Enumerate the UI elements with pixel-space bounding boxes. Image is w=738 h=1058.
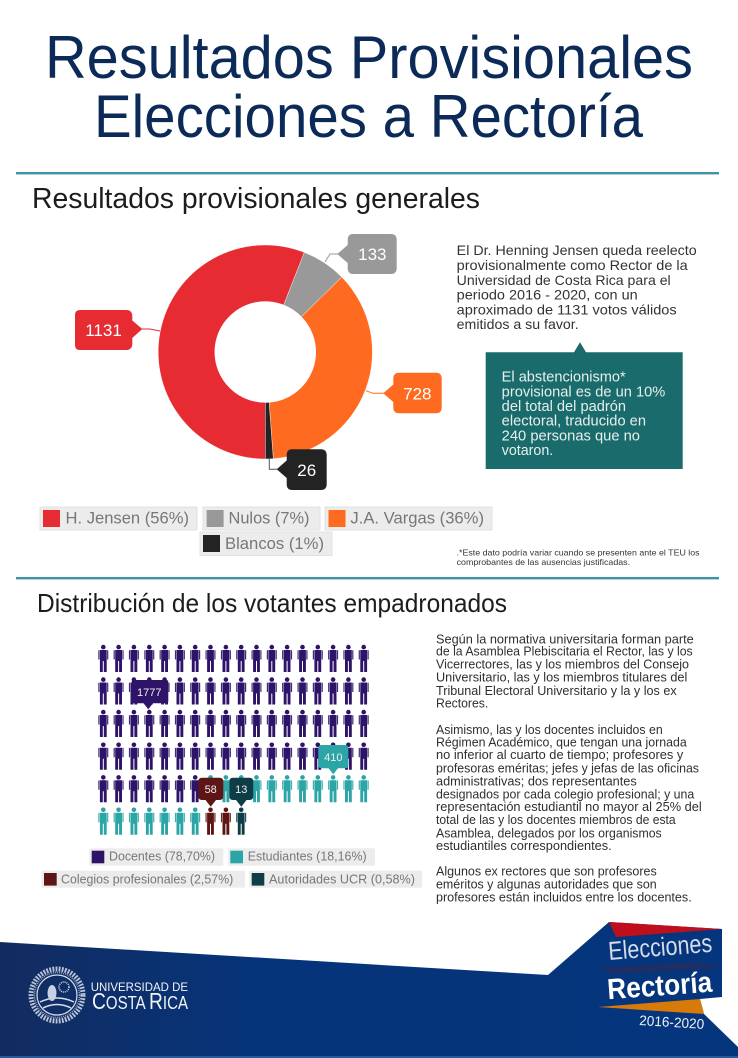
text: normativa universitaria: no inferior al cuarto de tiempo; profesores y (436, 747, 684, 762)
callout: abstencionismo: del total del padrón (502, 399, 626, 415)
callout: abstencionismo: electoral, traducido en (502, 414, 646, 430)
text: Henning Jensen paragraph: provisionalmente como Rector de la (457, 257, 688, 273)
legend item: J.A. Vargas: J.A. Vargas (36%) (350, 510, 484, 528)
callout: abstencionismo: provisional es de un 10% (502, 384, 665, 400)
tooltip: 410 (318, 745, 348, 774)
callout: 728: 728 (403, 384, 431, 404)
text: normativa universitaria: designados por cada colegio profesional; y una (436, 786, 695, 801)
heading: distribucion: Distribución de los votantes empadronados (37, 588, 507, 618)
badge text: years: 2016-2020 (639, 1012, 705, 1032)
legend item: Estudiantes: Estudiantes (18,16%) (248, 849, 367, 864)
text: Henning Jensen paragraph: Universidad de Costa Rica para el (457, 272, 671, 288)
row 1 (98, 645, 369, 672)
legend item: H. Jensen: H. Jensen (56%) (66, 510, 189, 528)
title (45, 24, 693, 150)
row 6 (98, 808, 246, 835)
footnote (457, 548, 700, 567)
segment: Nulos (284, 252, 342, 317)
legend item: J.A. Vargas (325, 507, 492, 530)
text: normativa universitaria: Tribunal Electoral Universitario y la y los ex (436, 683, 677, 698)
callout: abstencionismo: El abstencionismo* (502, 370, 626, 386)
logo: university name: COSTA RICA (92, 988, 188, 1014)
ribbon: dark fold (600, 962, 722, 974)
callout: 728 (366, 373, 442, 413)
text: normativa universitaria: representación estudiantil no mayor al 25% del (436, 799, 702, 814)
legend item: H. Jensen (40, 507, 197, 530)
logo: university name: UNIVERSIDAD DE (91, 980, 188, 994)
legend item: Colegios profesionales: Colegios profesionales (2,57%) (61, 871, 233, 886)
legend item: Blancos: Blancos (1%) (225, 535, 324, 553)
row 4 (98, 742, 369, 770)
callout: 1131: 1131 (85, 321, 122, 340)
text: normativa universitaria: Asimismo, las y los docentes incluidos en (436, 722, 663, 737)
tooltip: 1777 (132, 680, 168, 709)
badge: Elecciones Rectoría 2016-2020 (598, 922, 722, 1032)
ribbon: red (609, 922, 722, 937)
text: Henning Jensen paragraph: periodo 2016 - 2020, con un (457, 286, 638, 302)
callout: abstencionismo: 240 personas que no (502, 428, 640, 444)
callout: abstencionismo: votaron. (502, 443, 553, 459)
tooltip: 410: 410 (324, 752, 342, 764)
text: Henning Jensen paragraph (457, 242, 697, 332)
legend item: Nulos: Nulos (7%) (228, 510, 310, 528)
text: normativa universitaria: profesoras eméritas; jefes y jefas de las oficinas (436, 760, 699, 775)
text: normativa universitaria: estudiantiles correspondientes. (436, 838, 612, 853)
legend item: Nulos (203, 507, 320, 530)
text: normativa universitaria: total de las y los docentes miembros de esta (436, 812, 676, 827)
title: Resultados Provisionales (45, 24, 693, 91)
text: normativa universitaria: administrativas; dos representantes (436, 774, 637, 789)
tooltip: 1777: 1777 (137, 687, 162, 699)
segment: H. Jensen (158, 245, 304, 459)
title: Elecciones a Rectoría (94, 83, 644, 150)
text: normativa universitaria: Algunos ex rectores que son profesores (436, 864, 657, 879)
logo: university crest (31, 969, 83, 1021)
callout: 26: 26 (297, 461, 316, 480)
text: Henning Jensen paragraph: emitidos a su favor. (457, 316, 579, 332)
text: normativa universitaria: Régimen Académico, que tengan una jornada (436, 735, 687, 750)
callout: abstencionismo (486, 342, 683, 469)
row 2 (98, 677, 369, 704)
text: Henning Jensen paragraph: El Dr. Henning Jensen queda reelecto (457, 242, 697, 258)
legend item: Docentes: Docentes (78,70%) (109, 849, 215, 864)
callout: 26 (269, 449, 327, 490)
tooltip: 13: 13 (235, 784, 247, 796)
segment: Blancos (265, 402, 273, 459)
text: normativa universitaria: Rectores. (436, 696, 488, 711)
pictogram chart (98, 645, 369, 835)
text: normativa universitaria: Según la normativa universitaria forman parte (436, 631, 694, 646)
callout: 133: 133 (358, 245, 386, 264)
legend: donut (40, 507, 492, 556)
text: normativa universitaria: Universitario, las y los miembros titulares del (436, 670, 687, 685)
badge text: Elecciones: Elecciones (607, 928, 713, 966)
heading: resultados generales: Resultados provisionales generales (32, 183, 480, 215)
text: normativa universitaria: Asamblea, delegados por los organismos (436, 825, 662, 840)
callout: 1131 (75, 310, 160, 350)
tooltip: 13 (229, 778, 253, 807)
footer band (0, 922, 738, 1058)
row 5 (98, 775, 369, 802)
text: normativa universitaria: eméritos y algunas autoridades que son (436, 876, 657, 891)
legend item: Blancos (200, 532, 332, 556)
text: normativa universitaria (436, 631, 702, 905)
badge text: Rectoría: Rectoría (606, 967, 714, 1006)
tooltip: 58: 58 (205, 784, 217, 796)
legend: pictogram (42, 848, 422, 888)
ribbon: orange (598, 999, 704, 1014)
tooltip: 58 (198, 778, 223, 807)
footnote: comprobantes de las ausencias justificadas. (457, 557, 630, 567)
text: Henning Jensen paragraph: aproximado de 1131 votos válidos (457, 301, 677, 317)
row 3 (98, 710, 369, 737)
legend item: Autoridades UCR: Autoridades UCR (0,58%) (269, 871, 415, 886)
footnote: .*Este dato podría variar cuando se presenten ante el TEU los (457, 548, 700, 558)
text: normativa universitaria: de la Asamblea Plebiscitaria el Rector, las y los (436, 644, 693, 659)
text: normativa universitaria: profesores están incluidos entre los docentes. (436, 890, 692, 905)
segment: J.A. Vargas (269, 277, 372, 459)
callout: 133 (325, 234, 397, 274)
text: normativa universitaria: Vicerrectores, las y los miembros del Consejo (436, 656, 689, 671)
donut chart (158, 245, 372, 459)
